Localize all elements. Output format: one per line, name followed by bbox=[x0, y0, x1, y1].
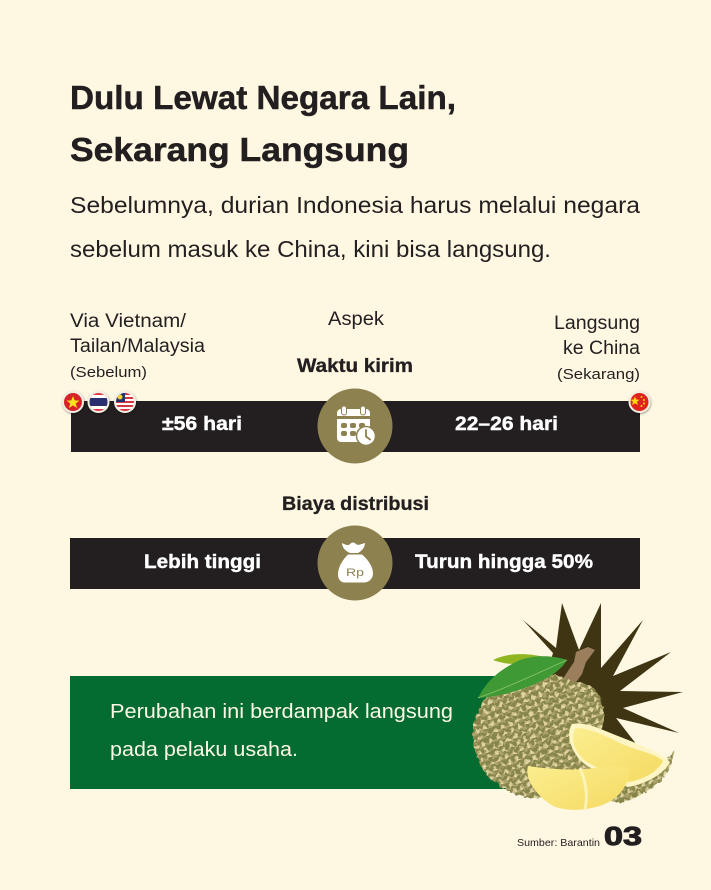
flags: before bbox=[62, 391, 136, 413]
heading: biaya distribusi: Biaya distribusi bbox=[282, 494, 429, 515]
bar bbox=[71, 401, 640, 452]
value after: Turun hingga 50% bbox=[415, 552, 593, 573]
flag: China bbox=[628, 391, 650, 413]
column label: aspect: Aspek bbox=[328, 309, 385, 330]
callout panel bbox=[70, 676, 510, 789]
flag: Vietnam bbox=[62, 391, 84, 413]
value after: 22–26 hari bbox=[455, 414, 558, 435]
callout panel: pada pelaku usaha. bbox=[110, 739, 298, 761]
page number: 03 bbox=[604, 821, 642, 851]
column label: before: (Sebelum) bbox=[70, 364, 147, 381]
column label: before: Tailan/Malaysia bbox=[70, 336, 205, 357]
bar bbox=[70, 538, 640, 589]
durian husk bbox=[473, 672, 604, 798]
flag: Thailand bbox=[88, 391, 110, 413]
durian back lobe bbox=[552, 682, 604, 748]
row: biaya distribusi bbox=[70, 526, 640, 600]
illustration: durian with starburst bbox=[473, 603, 683, 810]
column label: after: ke China bbox=[563, 338, 640, 359]
callout panel: Perubahan ini berdampak langsung bbox=[110, 701, 453, 723]
flag: Malaysia bbox=[114, 391, 136, 413]
back fruit segment bbox=[569, 723, 670, 787]
stem bbox=[562, 647, 595, 689]
icon: money bag bbox=[318, 526, 392, 600]
column label: before: Via Vietnam/ bbox=[70, 311, 187, 332]
big leaf bbox=[478, 656, 567, 698]
front fruit segment bbox=[527, 766, 630, 810]
back fruit rind bbox=[607, 750, 675, 802]
heading: waktu kirim: Waktu kirim bbox=[297, 356, 413, 377]
row: waktu kirim bbox=[71, 388, 640, 464]
intro text bbox=[70, 192, 641, 262]
source note: Sumber: Barantin bbox=[517, 837, 600, 849]
starburst bbox=[523, 603, 683, 745]
durian body bbox=[473, 672, 601, 798]
column label: before bbox=[70, 311, 205, 381]
title: Sekarang Langsung bbox=[70, 131, 409, 168]
column label: after bbox=[554, 313, 640, 383]
value before: ±56 hari bbox=[162, 414, 242, 435]
column label: after: (Sekarang) bbox=[557, 366, 640, 383]
column label: after: Langsung bbox=[554, 313, 640, 334]
icon: calendar and clock bbox=[318, 388, 392, 464]
title bbox=[70, 79, 456, 168]
title: Dulu Lewat Negara Lain, bbox=[70, 79, 456, 116]
value before: Lebih tinggi bbox=[144, 552, 261, 573]
intro text: sebelum masuk ke China, kini bisa langsung. bbox=[70, 236, 551, 262]
small leaf bbox=[493, 654, 545, 664]
icon: money bag: Rp bbox=[346, 567, 364, 579]
intro text: Sebelumnya, durian Indonesia harus melalui negara bbox=[70, 192, 641, 218]
